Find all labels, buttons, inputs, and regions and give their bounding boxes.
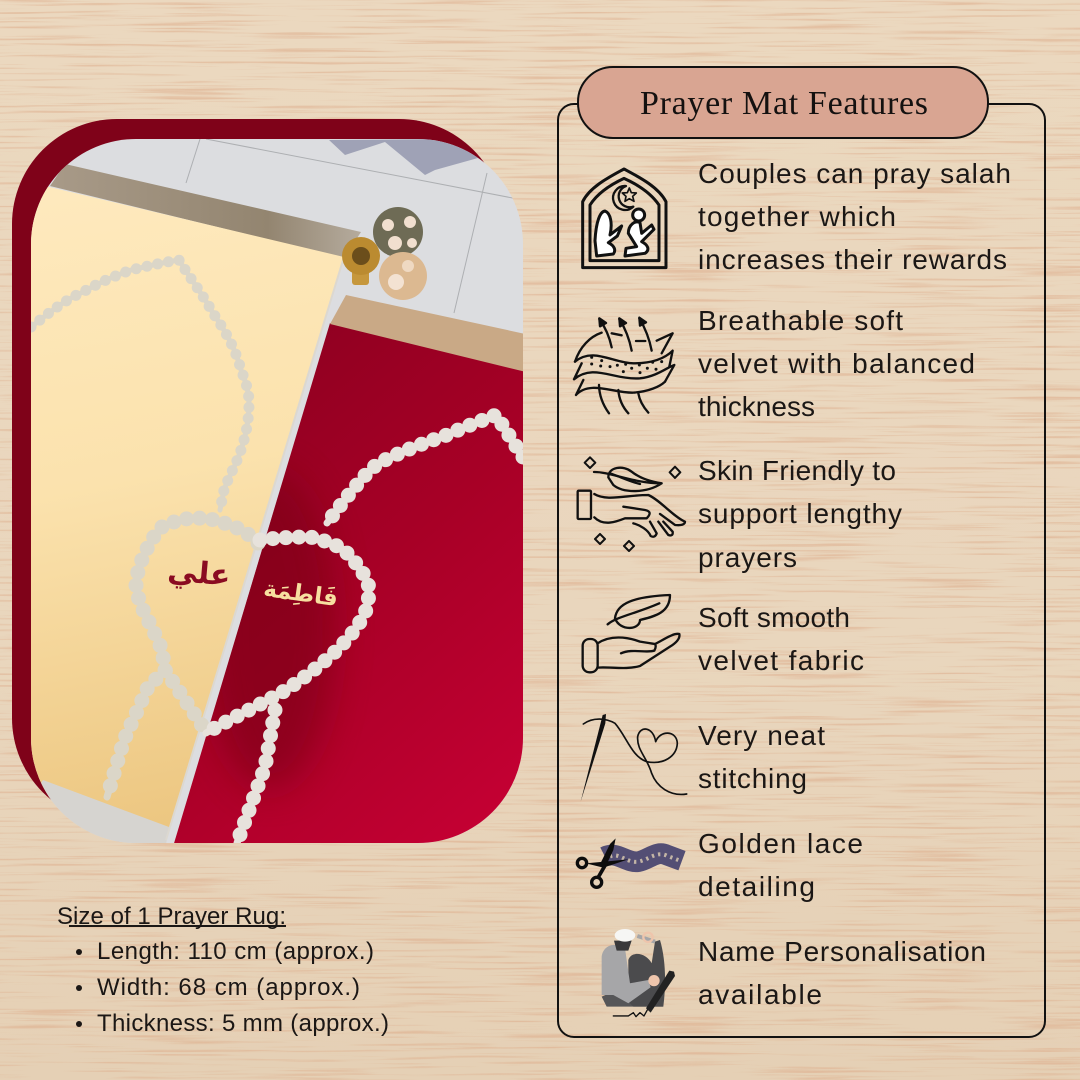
red mat <box>172 323 530 850</box>
text: rug size: Thickness: 5 mm (approx.) <box>97 1010 389 1037</box>
icon: needle and thread heart <box>581 714 687 802</box>
text: stitching <box>698 720 825 794</box>
text: lace <box>698 828 863 902</box>
text: rug size <box>57 903 389 1037</box>
text: skin friendly: Skin Friendly to <box>698 455 896 486</box>
lace on red mat <box>206 415 523 843</box>
name on cream mat: علي <box>166 553 232 594</box>
title pill: Prayer Mat Features <box>640 85 928 122</box>
text: personalisation: Name Personalisation <box>698 936 986 967</box>
text: soft velvet <box>698 602 864 676</box>
icon: soft velvet hand and leaf <box>583 595 679 672</box>
cushion <box>329 139 478 175</box>
icon: breathable fabric <box>574 318 674 413</box>
text: stitching: Very neat <box>698 720 825 751</box>
red fringe <box>330 295 530 373</box>
gold ornament <box>342 237 380 285</box>
text: lace: Golden lace <box>698 828 863 859</box>
text: rug size: Length: 110 cm (approx.) <box>97 938 374 965</box>
text: personalisation: available <box>698 979 822 1010</box>
text: rug size: Size of 1 Prayer Rug: <box>57 903 286 930</box>
text: soft velvet: Soft smooth <box>698 602 850 633</box>
text: couples: increases their rewards <box>698 244 1007 275</box>
text: skin friendly <box>698 455 902 573</box>
text: couples: together which <box>698 201 896 232</box>
lace on cream mat <box>31 260 258 797</box>
red mat dark area <box>205 470 335 790</box>
text: personalisation <box>698 936 986 1010</box>
top fringe cream mat <box>50 164 361 258</box>
cream mat <box>20 180 344 828</box>
text: soft velvet: velvet fabric <box>698 645 864 676</box>
icon: scissors and lace <box>577 838 682 887</box>
text: couples <box>698 158 1011 275</box>
text: rug size: Width: 68 cm (approx.) <box>97 974 360 1001</box>
text: skin friendly: support lengthy <box>698 498 902 529</box>
text: lace: detailing <box>698 871 815 902</box>
panel: features <box>558 104 1045 1037</box>
title pill <box>578 67 988 138</box>
text: skin friendly: prayers <box>698 542 797 573</box>
white fringe <box>41 780 169 843</box>
text: breathable: velvet with balanced <box>698 348 975 379</box>
text: couples: Couples can pray salah <box>698 158 1011 189</box>
icon: man with pen <box>602 929 675 1017</box>
text: stitching: stitching <box>698 763 807 794</box>
cream edge line <box>166 257 344 840</box>
text: breathable: thickness <box>698 391 815 422</box>
name on red mat: فَاطِمَة <box>262 576 340 612</box>
icon: skin friendly hand and feather <box>578 457 685 551</box>
text: breathable <box>698 305 975 422</box>
text: breathable: Breathable soft <box>698 305 903 336</box>
icon: couple praying <box>583 169 666 268</box>
photo: two personalised prayer mats <box>20 139 530 850</box>
maroon backing shape <box>12 119 504 823</box>
flowers <box>373 207 427 300</box>
